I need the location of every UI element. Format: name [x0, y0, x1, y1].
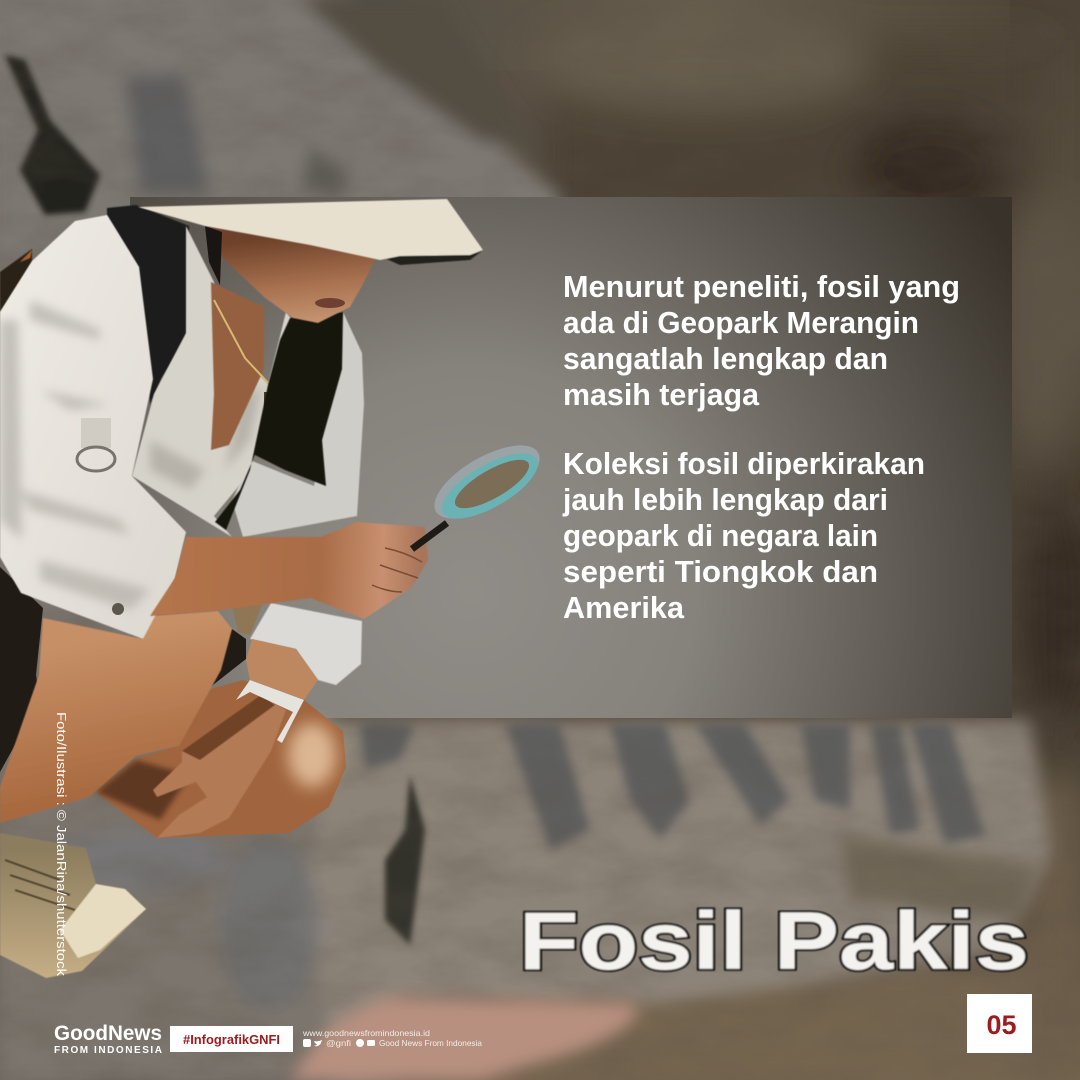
- finger lines: [372, 548, 422, 592]
- jacket sleeve: [0, 215, 186, 639]
- logo: GoodNews from Indonesia: GoodNews: [54, 1022, 162, 1045]
- finger under the fossil: [290, 997, 638, 1080]
- hashtag badge: [170, 1026, 293, 1052]
- logo: GoodNews from Indonesia: FROM INDONESIA: [54, 1045, 162, 1056]
- crack shadow: [5, 55, 100, 215]
- face: [207, 226, 379, 323]
- rocks seen behind the arm: [232, 605, 262, 635]
- jacket fold shadows: [150, 385, 262, 490]
- knee highlight: [288, 723, 336, 787]
- fossil fern stripes: [360, 724, 985, 850]
- forearm skin: [246, 639, 318, 700]
- logo: GoodNews from Indonesia: [54, 1022, 162, 1056]
- backpack: [0, 205, 189, 404]
- hashtag badge: #InfografikGNFI: [183, 1032, 280, 1047]
- website and social links: Good News From Indonesia: [379, 1038, 482, 1048]
- photo caption: Fosil Pakis: Fosil Pakis: [519, 896, 1029, 987]
- social icons: [303, 1039, 375, 1047]
- body text block 1: masih terjaga: [563, 377, 760, 412]
- magnifying glass: [412, 431, 551, 549]
- lips: [315, 298, 345, 308]
- website and social links: www.goodnewsfromindonesia.id: [302, 1028, 430, 1038]
- body text block 2: Koleksi fosil diperkirakan: [563, 446, 925, 481]
- jacket front: [132, 226, 300, 537]
- sleeve folds: [0, 300, 150, 610]
- chest skin: [211, 282, 264, 450]
- watch: [236, 680, 304, 743]
- website and social links: @gnfi: [326, 1038, 351, 1048]
- page number: [967, 994, 1032, 1053]
- panel: text background: [130, 197, 1012, 718]
- hair strand by the neck: [205, 226, 222, 285]
- hat: [138, 199, 483, 265]
- thigh: [0, 611, 232, 823]
- rear jacket sleeve: [232, 312, 364, 537]
- body text block 2: jauh lebih lengkap dari: [562, 482, 888, 517]
- body text block 2: seperti Tiongkok dan: [563, 554, 878, 589]
- boot: [0, 833, 146, 978]
- photo: woman with magnifying glass: [0, 199, 551, 978]
- lower sleeve: [250, 603, 362, 685]
- sleeve loop and ring: [77, 418, 115, 471]
- body text block 1: Menurut peneliti, fosil yang: [563, 269, 960, 304]
- necklace pendant: [264, 392, 274, 414]
- body text block 1: [563, 269, 960, 412]
- lower leg: [96, 680, 346, 838]
- body text block 2: geopark di negara lain: [563, 518, 878, 553]
- body text block 2: Amerika: [563, 590, 685, 625]
- body text block 1: sangatlah lengkap dan: [563, 341, 888, 376]
- hair: [215, 312, 343, 530]
- shorts: [0, 567, 246, 772]
- hand on knee: [153, 695, 286, 838]
- arm and hand with magnifier: [150, 522, 428, 619]
- photo credit: Foto/Ilustrasi : © JalanRina/shutterstock: [54, 712, 68, 977]
- page number: 05: [986, 1010, 1017, 1040]
- necklace cord: [214, 300, 270, 385]
- leg shadow: [96, 760, 190, 820]
- body text block 2: [562, 446, 925, 625]
- cuff button: [112, 603, 124, 615]
- body text block 1: ada di Geopark Merangin: [563, 305, 919, 340]
- website and social links: [302, 1028, 482, 1048]
